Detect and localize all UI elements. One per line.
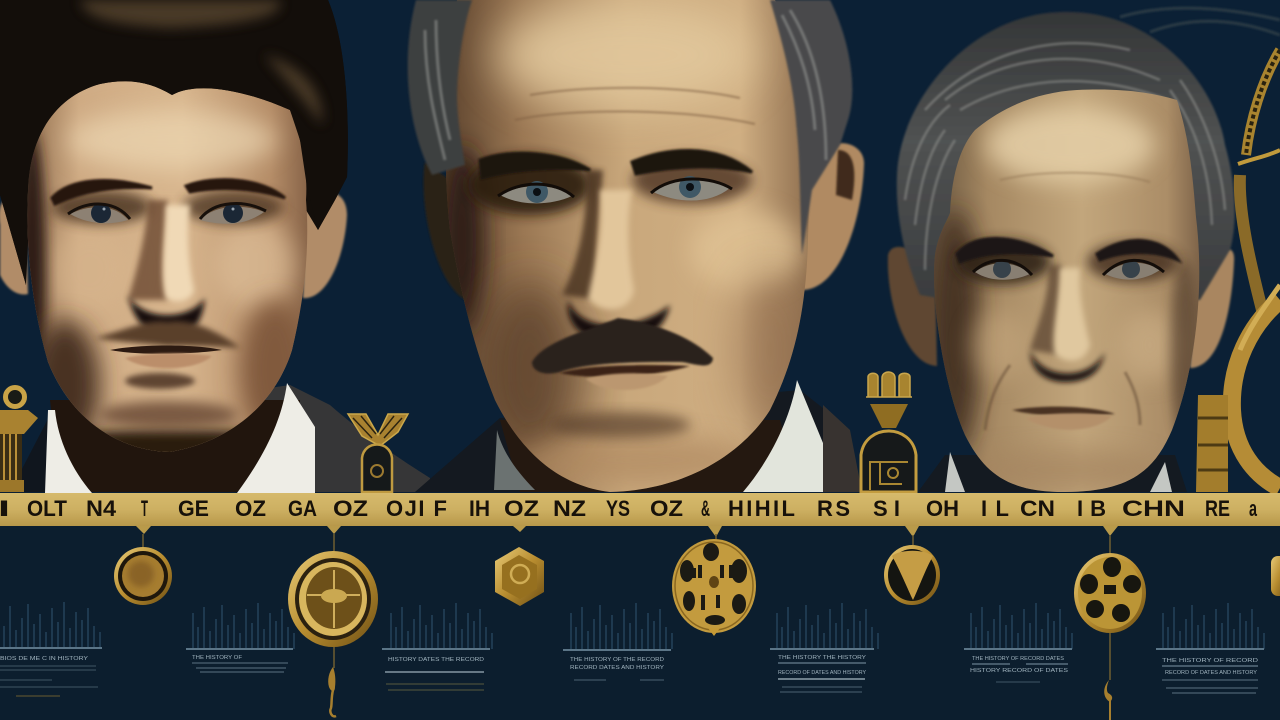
bar text: RS [817,496,850,521]
caption text 7 [1162,658,1259,693]
bar text: RE [1205,496,1230,521]
hair streaks [905,43,1225,270]
jacket [918,455,1187,492]
mouth [1012,407,1115,416]
caption text 4: RECORD DATES AND HISTORY [570,665,665,671]
chart 7 [1163,603,1264,649]
bar text: IH [469,496,490,521]
medallion 6 [1074,553,1146,633]
ornament: left column [0,388,38,492]
bar text: OZ [235,496,266,521]
bar text: OH [926,496,959,521]
eye sockets [468,155,592,215]
medallion 5 [884,545,940,605]
bar text: T [141,496,148,521]
ear [0,191,347,298]
eyebrows [957,238,1178,262]
caption text 7: THE HISTORY OF RECORD [1162,658,1259,664]
hook ornament left [328,667,336,716]
chart 5 [777,603,878,649]
bar text: OZ [504,496,539,521]
caption text 5 [778,655,867,692]
face [440,0,815,495]
bar text: a [1249,496,1257,521]
bar text: CN [1020,496,1055,521]
chart 4 [571,603,672,649]
caption 7 [1156,603,1264,693]
caption 3 [382,603,492,690]
hair highlights [80,0,322,125]
bar text: CHN [1122,496,1185,521]
chart 2 [193,603,294,649]
caption 2 [186,603,294,672]
collar [494,430,535,490]
caption text 5: RECORD OF DATES AND HISTORY [778,670,867,676]
ear [423,162,478,302]
cheek creases [985,365,1140,430]
bar text: IB [1077,496,1106,521]
bar text: OJI F [386,496,447,521]
ornament: right gold frame [1196,50,1280,492]
medallion 7 [1271,556,1280,596]
bar pointers [136,526,1118,537]
eyes [70,207,264,224]
medallion 3 [495,547,544,606]
hair [408,0,472,175]
caption text 6 [970,656,1069,682]
medallion 4 [672,539,756,636]
bar text: I L [981,496,1009,521]
ear [888,247,937,366]
eyes [500,180,730,203]
bar text: GE [178,496,209,521]
face [27,81,308,452]
eyes [975,263,1160,280]
eyebrows [52,180,285,204]
hair [897,12,1235,300]
nose shading [128,200,168,300]
caption 1 [0,602,102,696]
timeline bar [0,493,1280,537]
mouth [110,346,222,354]
chin shadow [125,373,195,389]
bar text: N4 [86,496,117,521]
nose shading [1030,265,1062,355]
neck [50,400,300,492]
collar [45,383,315,493]
moustache [532,318,713,374]
wisp of hair [1120,8,1280,35]
eye sockets [955,240,1051,284]
jacket [415,390,862,492]
chart 3 [391,603,492,649]
bar text: OLT [27,496,68,521]
jacket [10,385,430,492]
caption 6 [964,603,1072,682]
bar text: SI [873,496,900,521]
hair streaks [425,10,826,160]
moustache [95,321,240,348]
caption text 6: THE HISTORY OF RECORD DATES [972,656,1065,662]
hair [0,0,348,285]
bar text: & [701,496,710,521]
caption text 4 [570,657,665,680]
neck [500,420,800,492]
face [925,85,1210,495]
bar text: NZ [553,496,586,521]
bar text: YS [606,496,630,521]
caption text 1: BIOS DE ME C IN HISTORY [0,656,89,662]
chart 1 [0,602,100,648]
ornament: center-left trophy [348,414,408,492]
caption text 2: THE HISTORY OF [192,655,242,661]
caption text 6: HISTORY RECORD OF DATES [970,668,1069,674]
medallion 2 [288,551,378,647]
hair backing [0,0,348,285]
caption 4 [563,603,672,680]
portrait: center man [408,0,864,495]
medallion 1 [114,547,172,605]
eyebrows [480,150,752,178]
caption text 4: THE HISTORY OF THE RECORD [570,657,664,663]
caption 5 [770,603,878,692]
chart 6 [971,603,1072,649]
nose shading [562,170,603,300]
caption text 3: HISTORY DATES THE RECORD [388,657,485,663]
bar text: OZ [650,496,683,521]
portrait: left man [0,0,430,493]
ornament: center-right trophy [861,372,916,492]
hook ornament right [1104,680,1112,720]
portrait: right man [888,8,1280,495]
collar [945,452,1172,492]
connector lines [143,534,1110,680]
bar text [0,496,1257,521]
eye sockets [52,190,152,224]
caption text 7: RECORD OF DATES AND HISTORY [1165,670,1258,676]
bar text: OZ [333,496,368,521]
mouth [560,365,690,377]
bar text: GA [288,496,317,521]
caption text 5: THE HISTORY THE HISTORY [778,655,867,661]
bar text: HIHIL [728,496,795,521]
